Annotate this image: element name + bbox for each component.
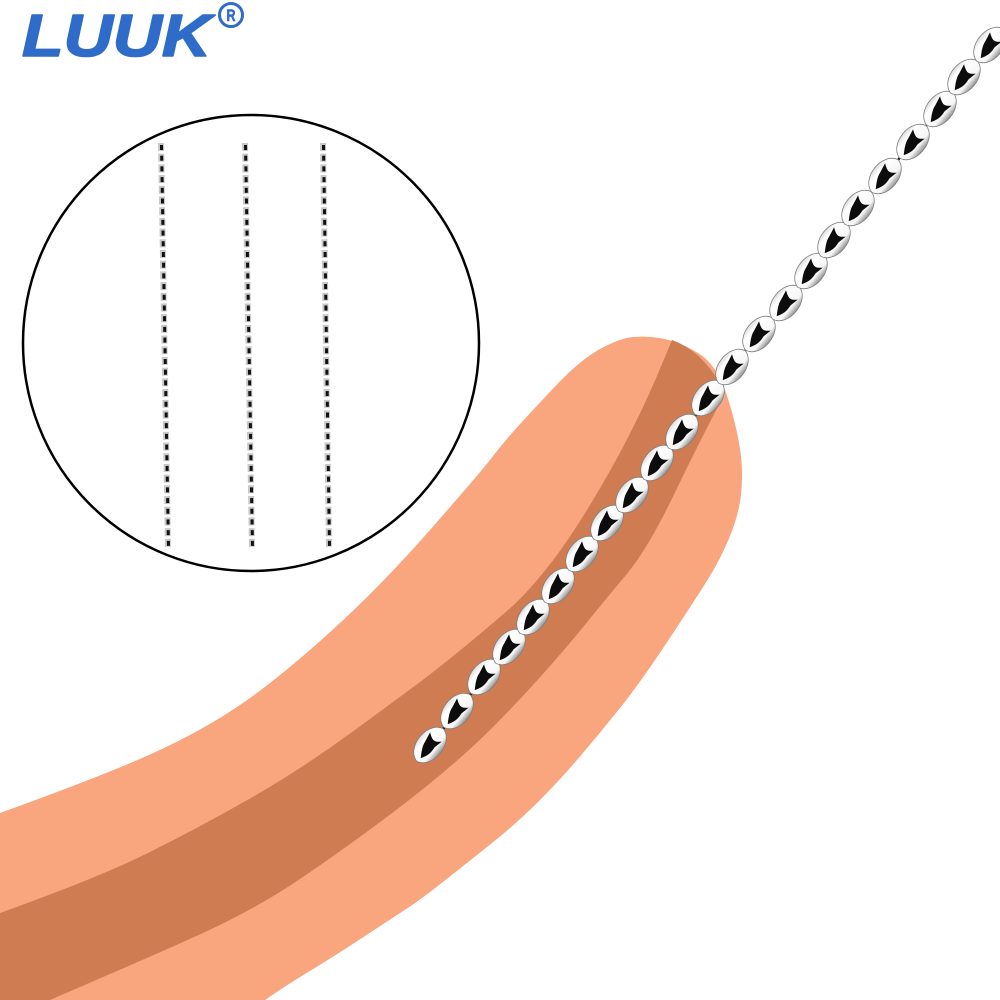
inner channel — [0, 340, 725, 1000]
bead rod — [407, 17, 1000, 770]
logo: registered mark — [220, 4, 242, 26]
inset rod 1 — [161, 143, 168, 549]
outer skin shape — [0, 337, 742, 1000]
logo: LUUK: LUUK — [22, 3, 216, 69]
inset circle with three bead rods — [23, 115, 479, 571]
inset rod 3 — [323, 143, 330, 547]
inset rod 2 — [245, 143, 252, 547]
anatomical diagram body — [0, 337, 742, 1000]
logo: registered mark: R — [226, 6, 236, 25]
